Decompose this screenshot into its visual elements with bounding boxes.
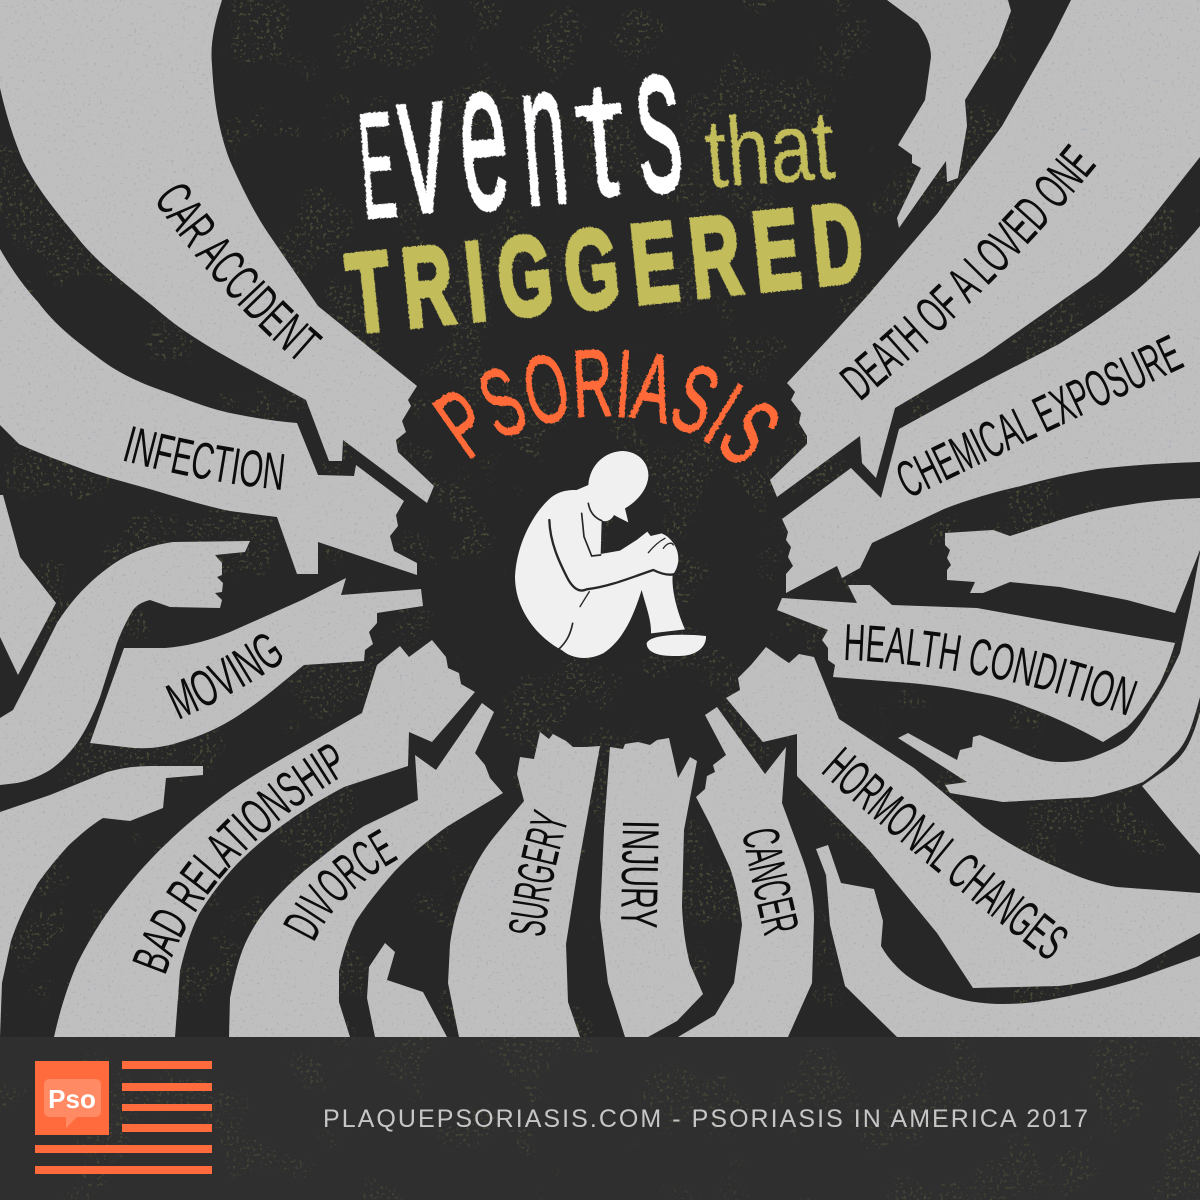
title (342, 0, 882, 464)
arm: pointing hand, lower left (0, 766, 203, 1037)
title: Events: e (449, 12, 516, 256)
label: health condition: HEALTH CONDITION (845, 624, 1138, 716)
arm: injury (600, 738, 703, 1037)
logo: Pso flag: Pso (48, 1084, 96, 1114)
title: Events: E (353, 80, 401, 250)
title: that: that (701, 89, 838, 209)
arm: cancer (678, 707, 814, 1037)
title: PSORIASIS: PSORIASIS (432, 348, 778, 464)
arm: pointing hand, upper left (0, 541, 250, 785)
arm: bottom right (816, 845, 1200, 1037)
title: Events (348, 0, 690, 264)
arm: car accident (0, 0, 434, 503)
arm: infection (0, 249, 417, 575)
label: injury: INJURY (621, 822, 659, 928)
title: Events: t (580, 46, 623, 231)
footer source text: PLAQUEPSORIASIS.COM - PSORIASIS IN AMERICA 2017 (323, 1105, 1088, 1133)
arm: far left wedge (0, 495, 56, 675)
footer bar (0, 1037, 1200, 1200)
icon: crouching person (515, 451, 706, 658)
label: hormonal changes: HORMONAL CHANGES (822, 746, 1068, 958)
labels (124, 144, 1185, 974)
label: bad relationship: BAD RELATIONSHIP (132, 744, 339, 974)
arm: surgery (448, 732, 600, 1037)
label: surgery: SURGERY (509, 808, 567, 936)
label: car accident: CAR ACCIDENT (158, 184, 324, 360)
logo: Pso flag (35, 1061, 212, 1174)
label: death of a loved one: DEATH OF A LOVED ONE (838, 144, 1096, 400)
label: chemical exposure: CHEMICAL EXPOSURE (898, 334, 1185, 496)
arm: death of a loved one (770, 0, 1200, 497)
label: infection: INFECTION (124, 426, 284, 490)
title: Events: v (390, 26, 454, 258)
title: Events: n (512, 17, 575, 249)
arm: small hand, bottom (367, 943, 447, 1037)
arm: far right strip (1142, 712, 1200, 855)
arm: outer hand, right (898, 553, 1200, 802)
label: moving: MOVING (166, 634, 282, 720)
title: TRIGGERED: TRIGGERED (342, 178, 882, 357)
arm: hormonal changes (726, 647, 1200, 988)
label: divorce: DIVORCE (283, 828, 398, 941)
label: cancer: CANCER (743, 829, 798, 936)
arm: chemical exposure (782, 226, 1200, 593)
arm: bad relationship (54, 640, 475, 1037)
arm: health condition (777, 585, 1175, 742)
arm: pointing hand, top right (887, 0, 1011, 228)
arm: divorce (229, 703, 503, 1037)
arm: moving (90, 578, 423, 748)
arm: upper right hand (945, 498, 1200, 613)
